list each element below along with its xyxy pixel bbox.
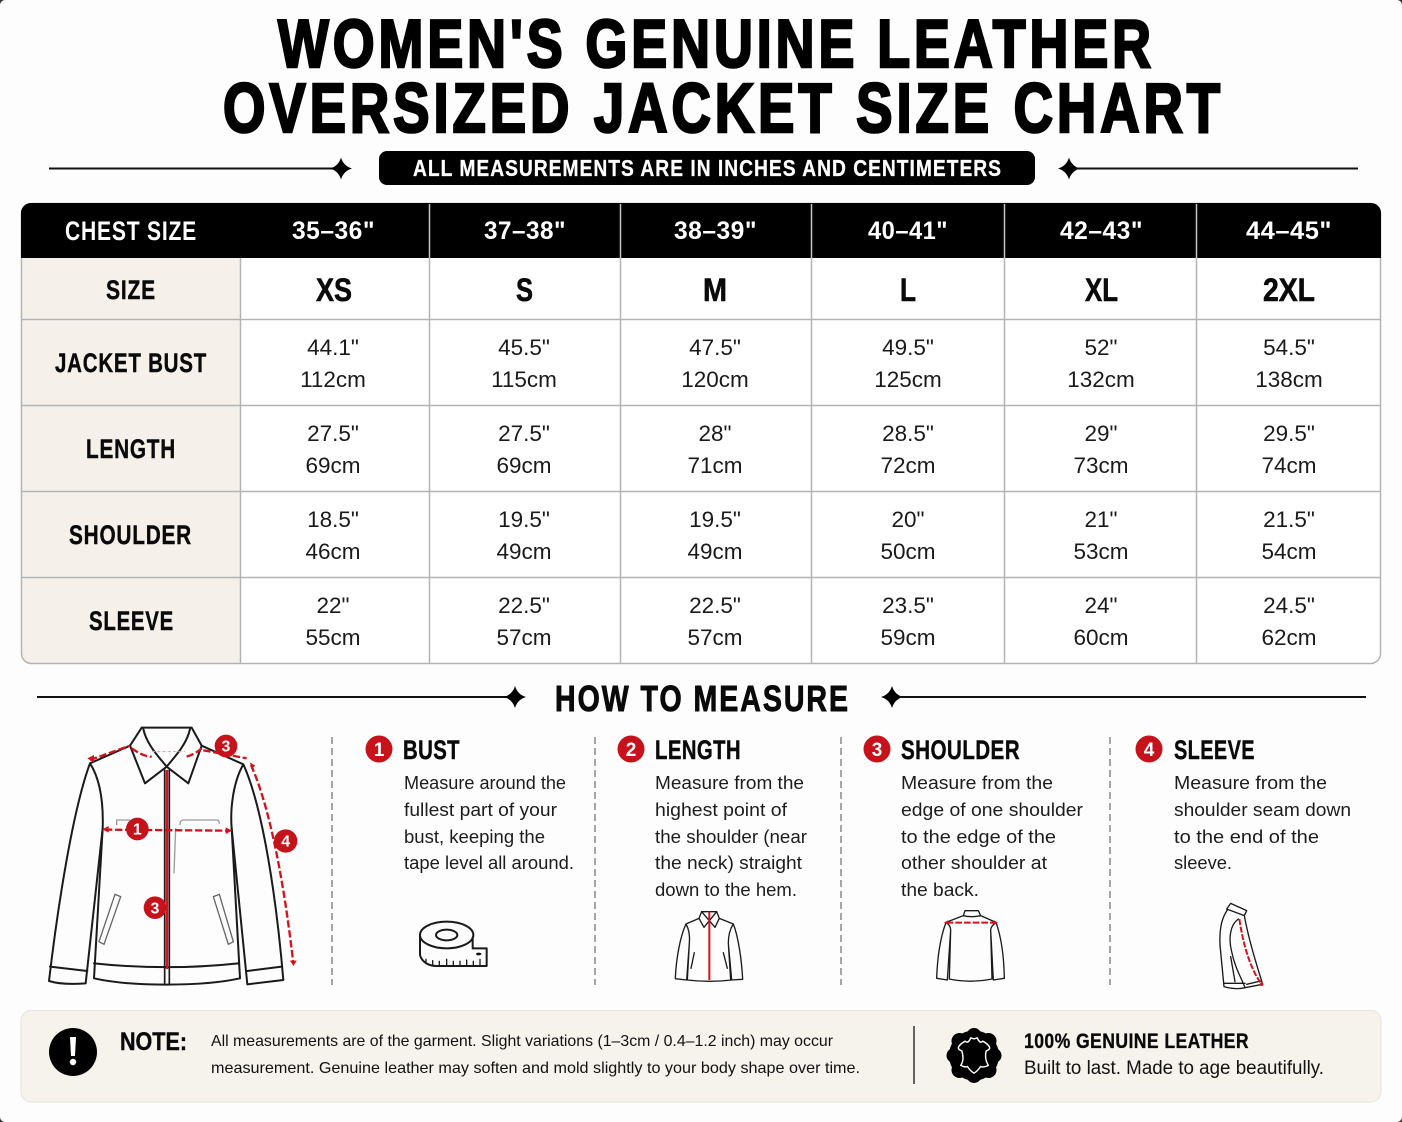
row: sleeve: 57cm <box>687 625 743 650</box>
row: jacket bust: 115cm <box>491 367 557 392</box>
step: bust: fullest part of your <box>404 799 557 820</box>
row: length: 69cm <box>305 453 361 478</box>
note text: measurement. Genuine leather may soften and mold slightly to your body shape over time. <box>211 1060 860 1077</box>
bust measurement line <box>102 826 232 834</box>
row: size: 2XL <box>1263 272 1315 308</box>
step: sleeve: to the end of the <box>1174 826 1319 847</box>
row: jacket bust: 47.5" <box>689 335 741 360</box>
row: length: 73cm <box>1073 453 1129 478</box>
sleeve measurement line <box>250 762 297 966</box>
header row: 35–36" <box>292 217 375 245</box>
row: jacket bust: 125cm <box>874 367 942 392</box>
marker 3 top <box>215 735 237 757</box>
row: sleeve: 24" <box>1084 593 1118 618</box>
step: sleeve: sleeve. <box>1174 852 1232 873</box>
row: size: SIZE <box>106 275 156 305</box>
step: sleeve: SLEEVE <box>1174 735 1255 765</box>
icon: side jacket with sleeve line <box>1220 903 1263 989</box>
row: jacket bust: 52" <box>1084 335 1118 360</box>
row: shoulder: SHOULDER <box>69 520 192 550</box>
row: sleeve: 57cm <box>496 625 552 650</box>
step: length <box>618 735 807 981</box>
jacket diagram with measurement markers <box>49 728 297 985</box>
note text <box>120 1028 860 1077</box>
step: bust <box>366 735 574 966</box>
header row: 40–41" <box>868 217 948 245</box>
step: sleeve: 4 <box>1144 740 1155 761</box>
size chart table <box>21 203 1381 664</box>
icon: leather hide badge <box>946 1028 1002 1083</box>
row: length: 69cm <box>496 453 552 478</box>
row: shoulder: 21.5" <box>1263 507 1315 532</box>
row: jacket bust: 44.1" <box>307 335 359 360</box>
step: length: the neck) straight <box>655 852 802 873</box>
row: shoulder: 49cm <box>496 539 552 564</box>
shoulder measurement line <box>87 746 247 763</box>
subtitle banner: ALL MEASUREMENTS ARE IN INCHES AND CENTIMETERS <box>413 155 1002 181</box>
row: shoulder: 21" <box>1084 507 1118 532</box>
row: shoulder: 19.5" <box>498 507 550 532</box>
row: size: XL <box>1085 272 1118 308</box>
row: length <box>86 421 1317 478</box>
marker 1 <box>126 818 149 840</box>
row: length: 27.5" <box>307 421 359 446</box>
row: length: 72cm <box>880 453 936 478</box>
step: bust: BUST <box>403 735 460 765</box>
row: shoulder <box>69 507 1317 564</box>
genuine leather text <box>1024 1030 1324 1079</box>
note text: NOTE: <box>120 1028 187 1056</box>
note panel <box>21 1010 1381 1102</box>
header row: 44–45" <box>1246 217 1332 245</box>
step: shoulder: the back. <box>901 879 979 900</box>
step: length: 2 <box>626 740 636 761</box>
marker 3 center: 3 <box>151 900 160 917</box>
row: sleeve: 22.5" <box>498 593 550 618</box>
marker 3 top: 3 <box>222 739 231 756</box>
subtitle banner <box>49 151 1358 185</box>
row: jacket bust: JACKET BUST <box>55 348 207 378</box>
row: shoulder: 50cm <box>880 539 936 564</box>
note text: All measurements are of the garment. Slight variations (1–3cm / 0.4–1.2 inch) may occur <box>211 1033 834 1050</box>
step: shoulder: to the edge of the <box>901 826 1056 847</box>
row: sleeve: 23.5" <box>882 593 934 618</box>
heading: how to measure: HOW TO MEASURE <box>555 678 850 719</box>
row: sleeve: 24.5" <box>1263 593 1315 618</box>
step: sleeve <box>1136 735 1351 989</box>
step: length: down to the hem. <box>655 879 797 900</box>
row: sleeve: 60cm <box>1073 625 1129 650</box>
row: length: LENGTH <box>86 434 176 464</box>
row: shoulder: 46cm <box>305 539 361 564</box>
row: sleeve: 62cm <box>1261 625 1317 650</box>
row: jacket bust: 138cm <box>1255 367 1323 392</box>
row: jacket bust: 120cm <box>681 367 749 392</box>
row: size: S <box>516 272 533 308</box>
genuine leather text: Built to last. Made to age beautifully. <box>1024 1058 1324 1079</box>
heading: how to measure <box>37 678 1366 719</box>
row: jacket bust <box>55 335 1323 392</box>
row: size <box>106 272 1315 308</box>
row: shoulder: 53cm <box>1073 539 1129 564</box>
step: shoulder <box>864 735 1083 981</box>
title <box>223 6 1224 147</box>
marker 4: 4 <box>281 834 290 851</box>
row: sleeve: 59cm <box>880 625 936 650</box>
row: jacket bust: 49.5" <box>882 335 934 360</box>
row: shoulder: 54cm <box>1261 539 1317 564</box>
row: jacket bust: 112cm <box>300 367 366 392</box>
row: sleeve <box>89 593 1317 650</box>
step: shoulder: SHOULDER <box>901 735 1020 765</box>
step: shoulder: Measure from the <box>901 772 1053 793</box>
header row: CHEST SIZE <box>65 216 197 246</box>
row: shoulder: 18.5" <box>307 507 359 532</box>
step: length: the shoulder (near <box>655 826 807 847</box>
row: shoulder: 19.5" <box>689 507 741 532</box>
row: length: 28.5" <box>882 421 934 446</box>
step: bust: 1 <box>374 740 385 761</box>
header row: 37–38" <box>484 217 566 245</box>
step: shoulder: edge of one shoulder <box>901 799 1083 820</box>
row: jacket bust: 54.5" <box>1263 335 1315 360</box>
step: shoulder: other shoulder at <box>901 852 1047 873</box>
row: sleeve: 22" <box>316 593 350 618</box>
icon: front jacket with length line <box>675 912 743 981</box>
marker 4 <box>274 829 297 853</box>
row: length: 29.5" <box>1263 421 1315 446</box>
step: shoulder: 3 <box>872 740 882 761</box>
title: WOMEN'S GENUINE LEATHER <box>278 6 1155 82</box>
icon: exclamation <box>49 1028 97 1076</box>
header row: 38–39" <box>674 217 757 245</box>
genuine leather text: 100% GENUINE LEATHER <box>1024 1030 1249 1053</box>
marker 3 center <box>144 896 166 919</box>
step: sleeve: shoulder seam down <box>1174 799 1351 820</box>
row: shoulder: 20" <box>891 507 925 532</box>
step: bust: Measure around the <box>404 772 566 793</box>
row: length: 28" <box>698 421 732 446</box>
step: sleeve: Measure from the <box>1174 772 1327 793</box>
header row: 42–43" <box>1060 217 1143 245</box>
step: bust: tape level all around. <box>404 852 574 873</box>
icon: back jacket with shoulder line <box>937 911 1004 981</box>
row: sleeve: 55cm <box>305 625 361 650</box>
row: length: 27.5" <box>498 421 550 446</box>
row: sleeve: SLEEVE <box>89 606 174 636</box>
row: sleeve: 22.5" <box>689 593 741 618</box>
row: size: M <box>703 272 727 308</box>
step: length: highest point of <box>655 799 788 820</box>
row: size: XS <box>316 272 352 308</box>
dashed column separators <box>332 737 1110 985</box>
row: shoulder: 49cm <box>687 539 743 564</box>
icon: tape measure <box>420 922 487 966</box>
step: bust: bust, keeping the <box>404 826 545 847</box>
marker 1: 1 <box>133 822 142 839</box>
row: jacket bust: 132cm <box>1067 367 1135 392</box>
row: length: 74cm <box>1261 453 1317 478</box>
step: length: Measure from the <box>655 772 804 793</box>
step: length: LENGTH <box>655 735 741 765</box>
row: size: L <box>900 272 916 308</box>
header row <box>65 216 1332 246</box>
row: jacket bust: 45.5" <box>498 335 550 360</box>
row: length: 29" <box>1084 421 1118 446</box>
row: length: 71cm <box>687 453 743 478</box>
